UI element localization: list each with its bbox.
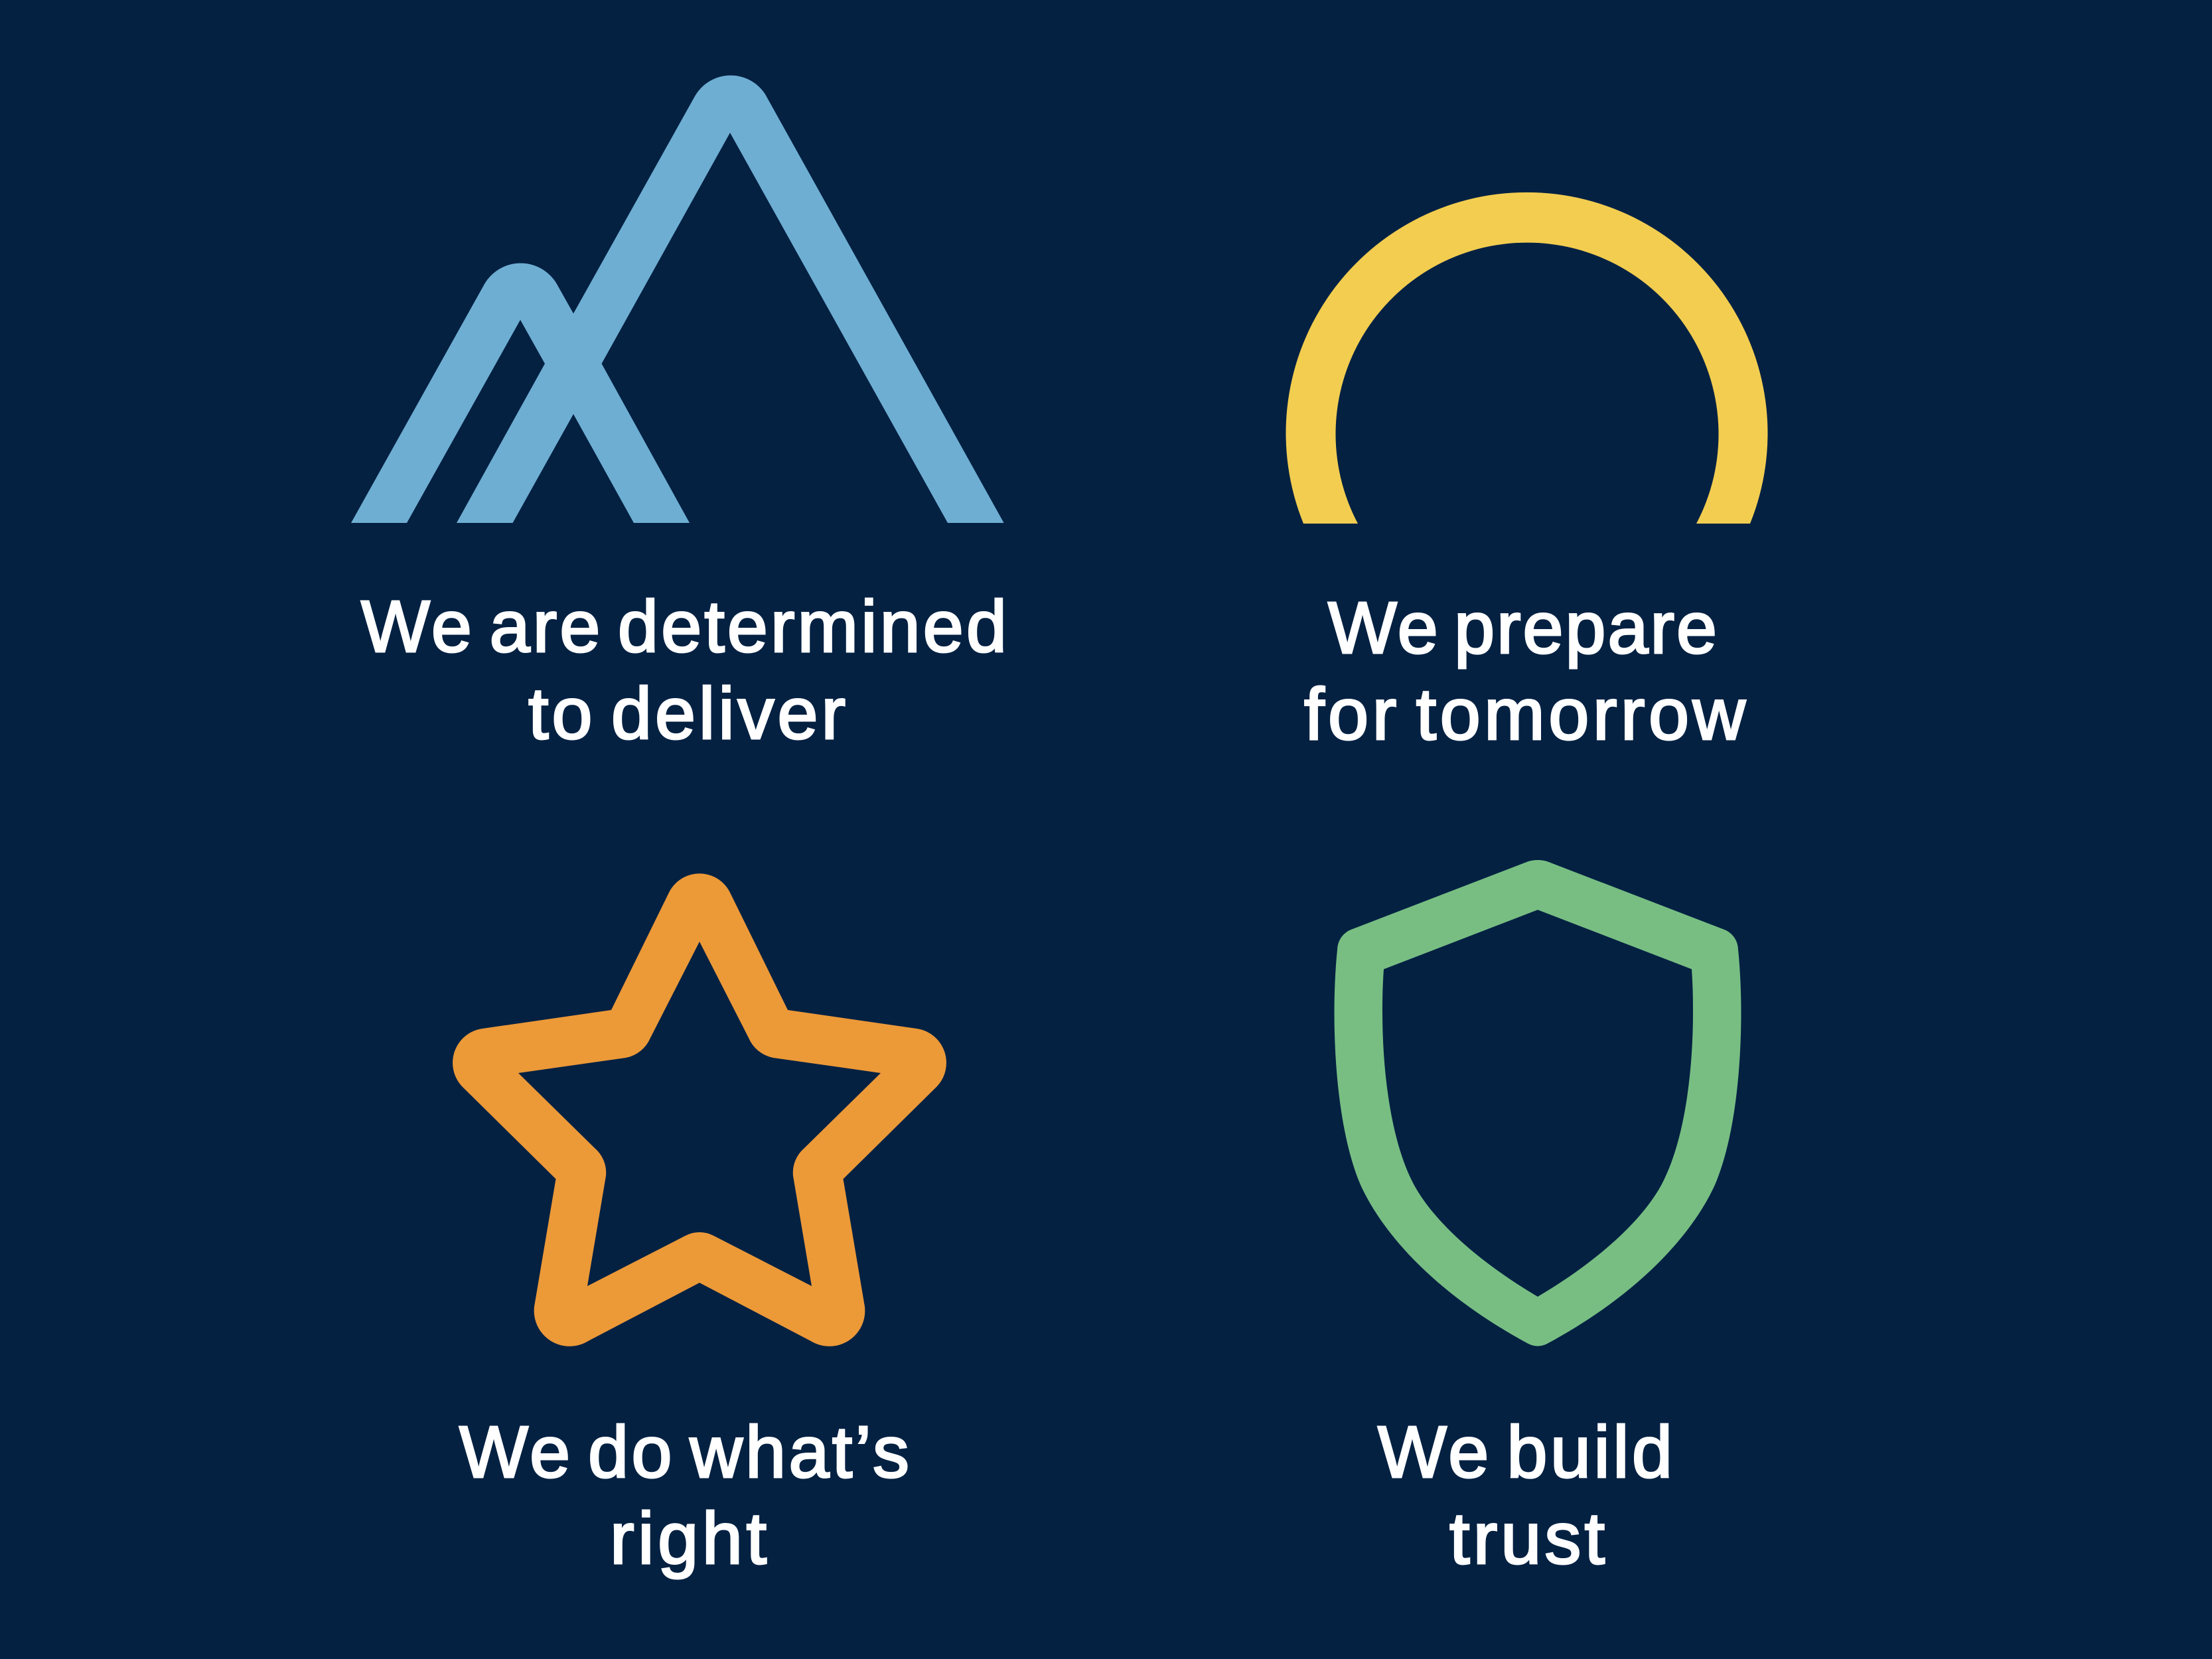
- label: we build trust: We build: [1378, 1411, 1672, 1493]
- label: we are determined to deliver: to deliver: [528, 673, 846, 755]
- panel: prepare for tomorrow: [1286, 192, 1768, 755]
- label: we do what's right: [459, 1411, 909, 1579]
- panel: build trust: [1334, 860, 1741, 1579]
- icon: star: [453, 873, 946, 1346]
- panel: determined to deliver: [351, 76, 1007, 755]
- label: we prepare for tomorrow: for tomorrow: [1304, 674, 1746, 755]
- label: we build trust: trust: [1449, 1498, 1605, 1579]
- label: we build trust: [1378, 1411, 1672, 1579]
- icon: shield: [1334, 860, 1741, 1346]
- label: we are determined to deliver: [361, 586, 1007, 755]
- label: we do what's right: right: [610, 1498, 767, 1579]
- panel: do what's right: [453, 873, 946, 1579]
- label: we do what's right: We do what’s: [459, 1411, 909, 1493]
- label: we are determined to deliver: We are determined: [361, 586, 1007, 668]
- icon: mountains: [351, 76, 1004, 523]
- icon: yellow arc: [1286, 192, 1768, 524]
- label: we prepare for tomorrow: [1304, 587, 1746, 755]
- label: we prepare for tomorrow: We prepare: [1328, 587, 1717, 669]
